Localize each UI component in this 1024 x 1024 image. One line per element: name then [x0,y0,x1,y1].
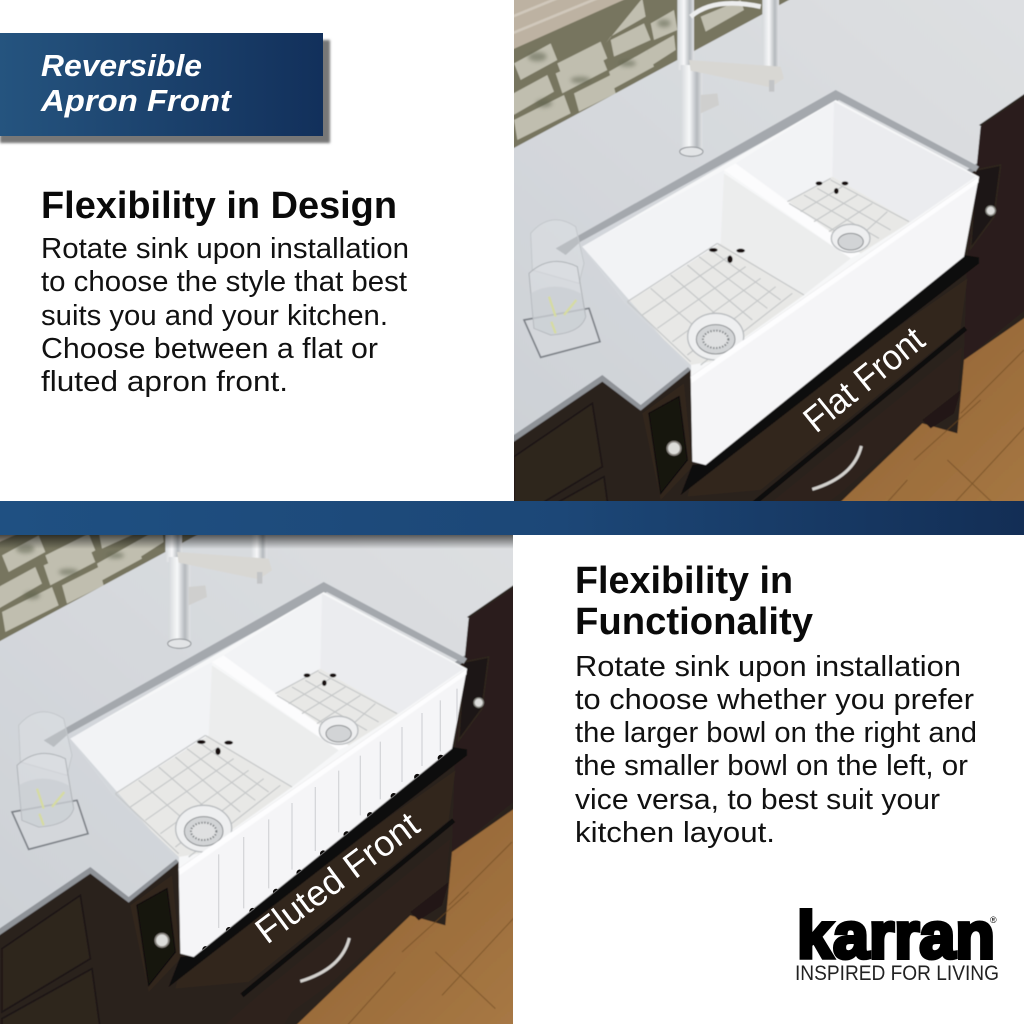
text block: functionality description: kitchen layout. [575,817,775,849]
heading: Flexibility in Functionality [575,560,813,643]
text block: design description: Choose between a flat or [41,333,378,365]
text block: design description: fluted apron front. [41,366,288,398]
text block: design description: Rotate sink upon installation [41,233,409,265]
text block: functionality description [575,651,977,849]
heading: Flexibility in Functionality: Flexibility in [575,560,793,602]
text block: design description [41,233,409,398]
divider bar [0,501,1024,535]
label: Fluted Front: Fluted Front [247,803,427,951]
logo: Karran: INSPIRED FOR LIVING [795,962,999,985]
text block: functionality description: the larger bowl on the right and [575,717,977,749]
heading: Flexibility in Functionality: Functionality [575,601,813,643]
text block: functionality description: to choose whether you prefer [575,684,974,716]
text block: design description: suits you and your kitchen. [41,300,388,332]
badge: Reversible Apron Front: Reversible [41,48,202,83]
text block: design description: to choose the style that best [41,266,407,298]
badge: Reversible Apron Front: Apron Front [40,83,233,118]
logo: Karran: ® [990,915,997,925]
label: Flat Front: Flat Front [795,318,932,440]
photo: sink with flat front [514,0,1024,501]
logo: Karran: karran [797,898,995,972]
text block: functionality description: the smaller bowl on the left, or [575,750,968,782]
photo: sink with fluted front [0,535,513,1024]
heading: Flexibility in Design: Flexibility in Design [41,185,397,227]
text block: functionality description: Rotate sink upon installation [575,651,961,683]
text block: functionality description: vice versa, to best suit your [575,784,940,816]
badge: Reversible Apron Front [0,33,330,143]
